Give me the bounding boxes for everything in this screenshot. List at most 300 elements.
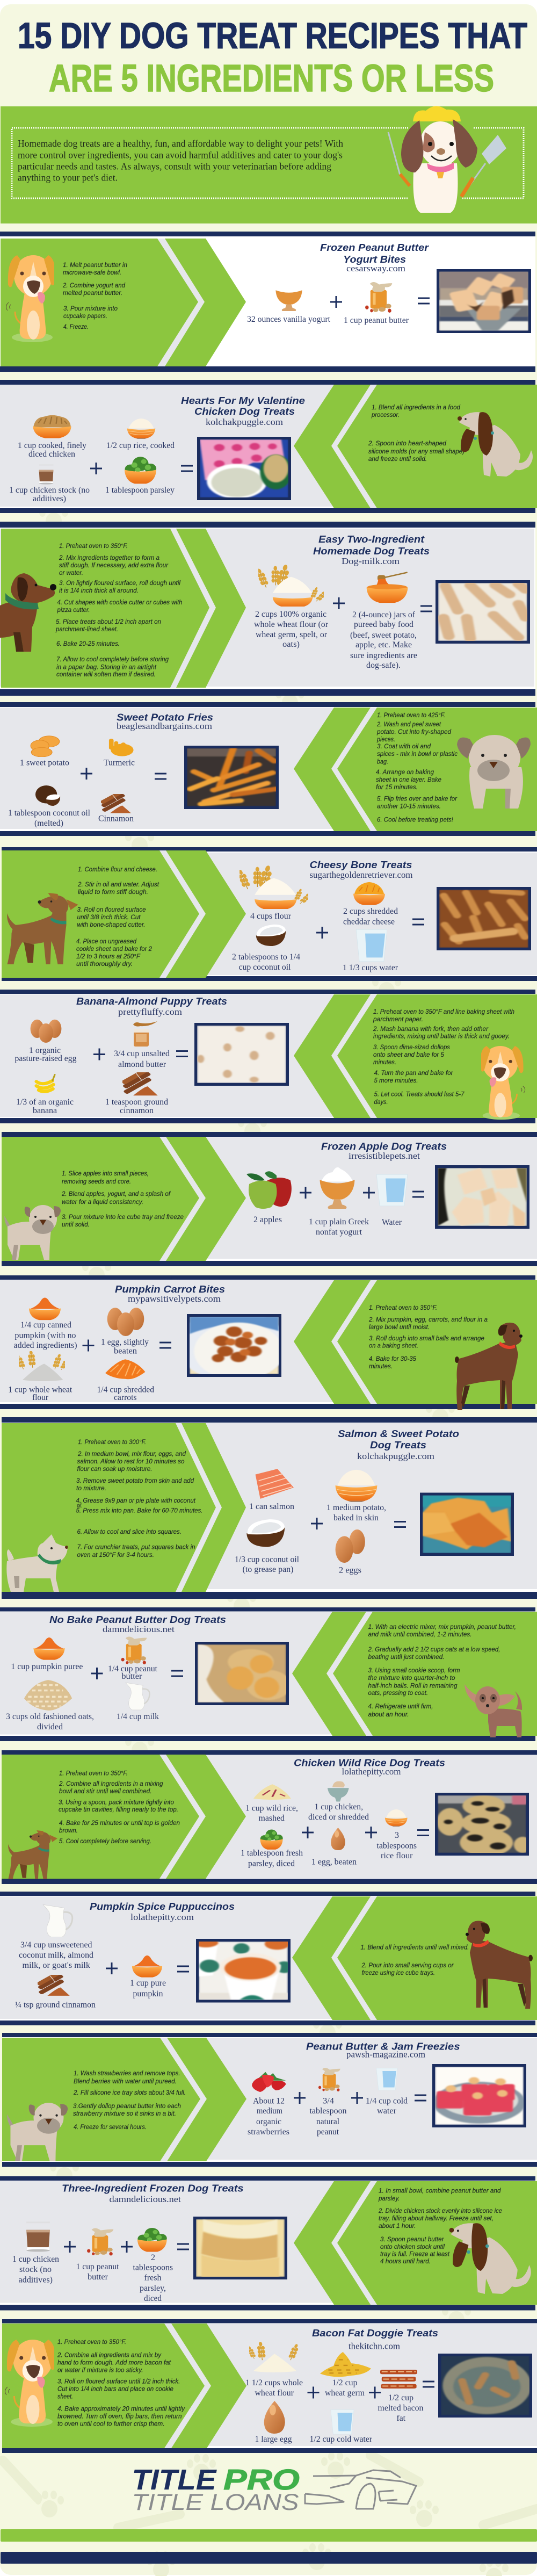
steps: 4. Arrange on baking xyxy=(376,769,434,776)
heading: pawsh-magazine.com xyxy=(346,2049,425,2060)
ingredient: parsley xyxy=(241,1829,303,1868)
ingredient: baby food: pureed baby food xyxy=(354,620,413,629)
ingredient: yogurt: 1 cup plain Greek xyxy=(309,1217,369,1226)
steps: 3. Pour mixture into ice cube tray and freeze xyxy=(62,1214,184,1221)
intro text xyxy=(18,138,343,183)
heading: No Bake Peanut Butter Dog Treats xyxy=(49,1614,226,1625)
heading xyxy=(313,534,430,566)
steps xyxy=(368,1305,488,1370)
heading xyxy=(309,860,412,880)
photo: pumpkin bites xyxy=(177,1310,288,1381)
ingredient: peanut butter: butter xyxy=(121,1672,142,1681)
steps: tray is full. Freeze at least xyxy=(380,2251,450,2257)
steps: 5. Flip fries over and bake for xyxy=(377,796,458,803)
ingredient: eggs xyxy=(336,1529,365,1575)
steps: 1. Preheat oven to 350°F. xyxy=(57,2339,126,2346)
ingredient: whole wheat flour: 1 cup whole wheat xyxy=(8,1385,72,1395)
ingredient: cheddar xyxy=(343,882,398,926)
heading: Easy Two-Ingredient xyxy=(318,534,425,545)
photo: peanut butter bites xyxy=(437,269,531,333)
steps xyxy=(368,1624,516,1718)
steps xyxy=(59,1771,180,1845)
ingredient: water: Water xyxy=(382,1218,402,1227)
ingredient: strawberries: medium xyxy=(257,2106,283,2116)
ingredient: wild rice: mashed xyxy=(259,1814,285,1823)
heading: damndelicious.net xyxy=(103,1624,175,1634)
steps: 1. Preheat oven to 350°F. xyxy=(59,543,128,550)
steps: bag. xyxy=(377,759,388,765)
steps: 3. Coat with oil and xyxy=(377,744,431,750)
ingredient: water xyxy=(309,2409,373,2444)
steps: or water. xyxy=(59,570,83,576)
steps: 2. Fill silicone ice tray slots about 3/4 full. xyxy=(73,2090,186,2096)
ingredient: egg xyxy=(255,2401,292,2444)
operators xyxy=(83,1340,171,1352)
heading: Dog Treats xyxy=(370,1440,426,1451)
icon: car outline xyxy=(305,2470,416,2509)
ingredient: coconut oil: 1/3 cup coconut oil xyxy=(235,1555,300,1564)
panel: Pumpkin Spice Puppuccinos xyxy=(0,1892,537,2025)
heading: Three-Ingredient Frozen Dog Treats xyxy=(62,2183,244,2194)
operators xyxy=(93,1049,188,1060)
heading: sugarthegoldenretriever.com xyxy=(309,870,412,880)
ingredient: milk: coconut milk, almond xyxy=(19,1951,93,1960)
navy footer band xyxy=(1,2552,537,2564)
steps: minutes. xyxy=(373,1059,396,1066)
steps: oven at 150°F for 3-4 hours. xyxy=(77,1552,154,1558)
steps xyxy=(73,2070,186,2131)
heading: Pumpkin Carrot Bites xyxy=(115,1284,225,1295)
ingredient: peanut butter xyxy=(344,282,409,325)
steps: 2. Combine all ingredients in a mixing xyxy=(59,1781,163,1787)
operators xyxy=(64,2241,189,2253)
photo: puppy treats xyxy=(194,1023,289,1086)
steps: 3. Spoon peanut butter xyxy=(380,2236,445,2243)
steps: 2. Spoon into heart-shaped xyxy=(368,441,447,447)
steps xyxy=(76,1439,203,1558)
heading xyxy=(294,1758,445,1777)
steps: 1. Preheat oven to 350°F and line baking sheet with xyxy=(373,1009,514,1015)
steps: 1. Combine flour and cheese. xyxy=(78,867,157,873)
steps: and milk until combined, 1-2 minutes. xyxy=(368,1632,471,1638)
photo: fries xyxy=(184,746,279,809)
steps: 1. Slice apples into small pieces, xyxy=(62,1171,149,1177)
steps: 1. In small bowl, combine peanut butter and xyxy=(379,2188,501,2194)
ingredient: pumpkin xyxy=(130,1956,166,1998)
steps: about 1 hour. xyxy=(379,2223,416,2229)
ingredient: oats xyxy=(6,1680,94,1731)
ingredient: wheat germ: wheat germ xyxy=(325,2389,365,2398)
steps: 6. Allow to cool and slice into squares. xyxy=(77,1529,182,1535)
steps: oats, pressing to coat. xyxy=(368,1690,428,1697)
ingredient: flour xyxy=(236,865,316,921)
steps: 3. On lightly floured surface, roll dough until xyxy=(59,580,180,587)
ingredient: cinnamon xyxy=(15,1972,96,2009)
steps: 1. Blend all ingredients in a food xyxy=(372,405,461,411)
ingredient: peanut butter: natural xyxy=(316,2117,340,2126)
steps: 5. Let cool. Treats should last 5-7 xyxy=(374,1092,465,1098)
ingredient: coconut oil: cup coconut oil xyxy=(238,963,291,972)
logo: Title Pro Title Loans: TITLE LOANS xyxy=(132,2490,299,2515)
heading: cesarsway.com xyxy=(346,263,405,273)
steps: 6. Bake 20-25 minutes. xyxy=(56,641,120,647)
panel: Pumpkin Carrot Bites xyxy=(0,1275,537,1410)
ingredient: egg: 1 organic xyxy=(29,1046,61,1055)
logo: Title Pro Title Loans: TITLE xyxy=(132,2464,217,2496)
ingredient: rice flour: tablespoons xyxy=(377,1842,417,1850)
steps: ingredients, mixing until batter is thick and gooey. xyxy=(373,1034,510,1040)
steps: onto chicken stock until xyxy=(380,2244,445,2250)
ingredient: carrots xyxy=(97,1359,154,1402)
steps: spices - mix in bowl or plastic xyxy=(377,751,458,757)
heading: thekitchn.com xyxy=(349,2341,400,2351)
ingredient: parsley: 2 xyxy=(151,2253,155,2262)
icon: beagle xyxy=(449,2223,531,2294)
ingredient: coconut oil xyxy=(232,925,300,972)
panel: Hearts For My Valentine Chicken Dog Treats xyxy=(0,380,537,513)
operators xyxy=(302,1827,429,1838)
ingredient: flour: wheat germ, spelt, or xyxy=(256,630,328,639)
ingredient: turmeric: Turmeric xyxy=(104,759,135,767)
steps: 1/2 to 3 hours at 250°F xyxy=(76,954,141,960)
steps: 4. Refrigerate until firm, xyxy=(368,1704,433,1710)
icon: golden dog xyxy=(5,2340,55,2427)
heading: Hearts For My Valentine xyxy=(181,395,305,406)
steps: 1. Preheat oven to 350°F. xyxy=(369,1305,437,1311)
heading xyxy=(320,242,429,273)
ingredient: parsley xyxy=(133,2228,173,2303)
steps: 4 hours until hard. xyxy=(380,2258,431,2265)
photo: bacon fat bones xyxy=(438,2354,532,2418)
heading xyxy=(306,2041,460,2060)
steps: melted peanut butter. xyxy=(63,290,122,297)
heading: prettyfluffy.com xyxy=(118,1007,182,1017)
icon: brown dog standing xyxy=(8,1830,57,1879)
heading xyxy=(338,1428,459,1461)
ingredient: chicken: 1 cup chicken, xyxy=(315,1802,363,1812)
steps: until solid. xyxy=(62,1222,90,1228)
ingredient: sweet potato: 1 sweet potato xyxy=(20,759,69,767)
icon: pug side xyxy=(7,2103,68,2161)
steps: Blend berries with water until pureed. xyxy=(74,2079,177,2085)
icon: doberman xyxy=(466,1921,533,2009)
ingredient: parsley: diced xyxy=(144,2294,162,2303)
ingredient: chicken stock: stock (no xyxy=(19,2265,52,2274)
ingredient: wheat germ: 1/2 cup xyxy=(332,2378,358,2387)
operators xyxy=(106,1962,189,1974)
steps xyxy=(373,1009,514,1106)
steps xyxy=(57,2339,185,2427)
ingredient: chicken stock xyxy=(9,465,90,503)
ingredient: cinnamon xyxy=(105,1069,168,1115)
heading: Chicken Dog Treats xyxy=(194,406,295,417)
ingredient: wild rice xyxy=(245,1784,298,1823)
ingredient: egg: pasture-raised egg xyxy=(15,1054,76,1063)
steps: 6. Cool before treating pets! xyxy=(377,817,454,823)
ingredient: coconut oil: (to grease pan) xyxy=(243,1565,293,1574)
steps: the mixture into quarter-inch to xyxy=(368,1675,455,1682)
heading: Peanut Butter & Jam Freezies xyxy=(306,2041,460,2052)
ingredient: chicken stock: 1 cup chicken stock (no xyxy=(9,486,90,495)
icon: pug front xyxy=(457,735,531,809)
ingredient: flour: 4 cups flour xyxy=(250,912,292,921)
steps: 5. Cool completely before serving. xyxy=(59,1838,151,1845)
ingredient: egg: 1 large egg xyxy=(255,2435,292,2444)
steps: 2. Pour into small serving cups or xyxy=(361,1962,454,1969)
steps xyxy=(378,2188,502,2265)
heading xyxy=(321,1141,447,1161)
ingredient: baby food: dog-safe). xyxy=(366,661,401,670)
steps: bowl and stir until well combined. xyxy=(59,1788,151,1795)
heading: Sweet Potato Fries xyxy=(117,712,213,723)
panel: Frozen Peanut Butter Yogurt Bites xyxy=(0,232,535,372)
operators xyxy=(307,2382,434,2398)
steps: 3. Remove sweet potato from skin and add xyxy=(76,1478,194,1484)
icon: chef dog with fork and spatula xyxy=(388,106,506,213)
heading: Dog-milk.com xyxy=(342,556,400,566)
ingredient: sweet potato: 1 medium potato, xyxy=(326,1503,386,1512)
ingredient: egg xyxy=(311,1828,357,1866)
photo: frozen apple cubes xyxy=(435,1165,529,1229)
panel: Three-Ingredient Frozen Dog Treats xyxy=(0,2176,537,2310)
ingredient: wheat flour xyxy=(245,2342,303,2398)
ingredient: coconut oil xyxy=(8,785,91,828)
operators xyxy=(81,768,166,780)
icon: pug side xyxy=(4,1205,61,1260)
steps: browned. Turn off oven, flip bars, then return xyxy=(57,2413,182,2420)
steps: 2. Mix ingredients together to form a xyxy=(59,555,159,561)
heading: damndelicious.net xyxy=(110,2194,181,2204)
operators xyxy=(311,1518,406,1529)
ingredient: carrots: carrots xyxy=(114,1393,136,1402)
panel: Banana-Almond Puppy Treats xyxy=(0,990,537,1123)
ingredient: egg xyxy=(15,1020,76,1063)
ingredient: cinnamon: Cinnamon xyxy=(98,814,134,823)
steps: freeze using ice cube trays. xyxy=(362,1970,435,1976)
intro text: Homemade dog treats are a healthy, fun, and affordable way to delight your pets! With xyxy=(18,138,343,149)
steps xyxy=(376,712,458,823)
steps: pieces. xyxy=(376,737,395,743)
steps: with bone-shaped cutter. xyxy=(77,922,145,928)
heading xyxy=(312,2328,438,2351)
photo: cheesy bones xyxy=(437,887,531,950)
steps: 4. Cut shapes with cookie cutter or cubes with xyxy=(57,600,183,606)
steps: brown. xyxy=(59,1828,78,1834)
ingredient: cinnamon: 1 teaspoon ground xyxy=(105,1098,168,1107)
heading: kolchakpuggle.com xyxy=(357,1451,434,1461)
ingredient: flour: oats) xyxy=(282,640,300,649)
icon: brown dog standing xyxy=(7,893,78,964)
ingredient: water: 1/4 cup cold xyxy=(366,2096,408,2106)
ingredient: yogurt: 32 ounces vanilla yogurt xyxy=(247,315,331,324)
heading: Yogurt Bites xyxy=(343,254,406,265)
ingredient: yogurt xyxy=(309,1167,369,1237)
steps: 3. Spoon dime-sized dollops xyxy=(373,1044,450,1051)
icon: westie xyxy=(6,1534,68,1592)
ingredient: parsley: parsley, diced xyxy=(248,1859,295,1868)
ingredient: rice flour: 3 xyxy=(395,1831,399,1840)
ingredient: cinnamon: ¼ tsp ground cinnamon xyxy=(15,2001,96,2009)
steps: 3. Using small cookie scoop, form xyxy=(368,1668,460,1674)
steps: 4. Bake for 30-35 xyxy=(369,1356,417,1362)
ingredient: peanut butter: 1 cup peanut butter xyxy=(344,316,409,325)
steps: pizza cutter. xyxy=(57,607,90,614)
steps: 4. Place on ungreased xyxy=(76,939,137,945)
steps: 3. Roll on floured surface xyxy=(77,907,146,913)
photo: puppuccino cups xyxy=(193,1938,293,2003)
ingredient: milk: milk, or goat's milk xyxy=(23,1961,90,1970)
heading: Frozen Apple Dog Treats xyxy=(321,1141,447,1152)
ingredient: oats: divided xyxy=(37,1722,63,1731)
ingredient: egg: 1 egg, slightly xyxy=(101,1338,149,1347)
steps: 3.Gently dollop peanut butter into each xyxy=(73,2103,181,2110)
heading: Salmon & Sweet Potato xyxy=(338,1428,459,1439)
steps xyxy=(76,867,159,968)
ingredient: banana: banana xyxy=(33,1106,57,1115)
steps: 3. Using a spoon, pack mixture tightly into xyxy=(59,1800,175,1806)
icon: beagle xyxy=(458,412,533,477)
icon: brown lab xyxy=(0,573,56,652)
panel: Salmon & Sweet Potato Dog Treats xyxy=(2,1417,537,1599)
panel: introduction xyxy=(1,106,537,223)
steps: to mixture. xyxy=(76,1485,106,1492)
steps: microwave-safe bowl. xyxy=(63,270,121,276)
ingredient: baby food: 2 (4-ounce) jars of xyxy=(352,610,416,619)
ingredient: chicken stock: 1 cup chicken xyxy=(12,2255,59,2264)
heading: lolathepitty.com xyxy=(130,1912,194,1922)
heading xyxy=(90,1901,235,1922)
steps: large bowl until moist. xyxy=(369,1324,430,1331)
ingredient: strawberries xyxy=(248,2072,289,2137)
steps: flour can soak up moisture. xyxy=(77,1466,153,1473)
ingredient: peanut butter: butter xyxy=(88,2272,108,2282)
panel: Easy Two-Ingredient Homemade Dog Treats xyxy=(0,522,535,696)
steps: parchment-lined sheet. xyxy=(55,626,118,633)
ingredient: strawberries: strawberries xyxy=(248,2127,289,2137)
ingredient: parsley: tablespoons xyxy=(133,2263,173,2272)
ingredient: pumpkin xyxy=(14,1297,77,1350)
ingredient: yogurt xyxy=(247,281,331,324)
photo: wild rice bites xyxy=(435,1793,532,1856)
steps xyxy=(361,1945,469,1976)
heading: lolathepitty.com xyxy=(342,1766,401,1777)
ingredient: pumpkin: added ingredients) xyxy=(14,1341,77,1350)
steps: for 15 minutes. xyxy=(376,784,418,791)
ingredient: milk xyxy=(19,1904,93,1970)
ingredient: peanut butter: peanut xyxy=(317,2127,339,2137)
ingredient: flour xyxy=(254,564,331,649)
steps: 4. Freeze for several hours. xyxy=(74,2124,147,2131)
ingredient: turmeric xyxy=(104,739,135,767)
ingredient: chicken: diced chicken xyxy=(28,450,75,459)
steps: liquid to form stiff dough. xyxy=(78,889,148,896)
operators xyxy=(330,296,430,308)
ingredient: baby food: (beef, sweet potato, xyxy=(350,631,417,640)
heading xyxy=(117,712,213,731)
steps: stiff dough. If necessary, add extra flour xyxy=(59,562,169,569)
steps: 7. For crunchier treats, put squares back in xyxy=(77,1544,195,1550)
operators xyxy=(300,1187,424,1199)
ingredient: pumpkin puree xyxy=(11,1637,83,1671)
steps: 7. Allow to cool completely before storing xyxy=(56,656,169,663)
photo: bone biscuits xyxy=(436,580,530,644)
ingredient: yogurt: nonfat yogurt xyxy=(316,1228,362,1237)
operators xyxy=(316,919,424,939)
ingredient: rice xyxy=(106,418,175,450)
ingredient: pumpkin puree: 1 cup pumpkin puree xyxy=(11,1662,83,1671)
steps: 4. Turn the pan and bake for xyxy=(374,1070,454,1077)
ingredient: wheat flour: wheat flour xyxy=(255,2389,294,2398)
ingredient: almond butter: almond butter xyxy=(118,1060,166,1069)
ingredient: sweet potato: baked in skin xyxy=(333,1513,379,1522)
steps: about an hour. xyxy=(368,1712,409,1718)
ingredient: baby food: sure ingredients are xyxy=(350,651,417,660)
steps xyxy=(368,405,465,463)
ingredient: apples xyxy=(246,1171,292,1224)
steps: 1. Preheat oven to 425°F. xyxy=(377,712,445,719)
ingredient: strawberries: organic xyxy=(256,2117,281,2126)
steps: 5. Place treats about 1/2 inch apart on xyxy=(56,619,161,625)
ingredient: pumpkin: pumpkin xyxy=(133,1989,163,1998)
steps: strawberry mixture so it sinks in a bit. xyxy=(73,2111,176,2117)
steps: container will soften them if desired. xyxy=(56,672,156,678)
steps: and freeze until solid. xyxy=(368,456,427,463)
ingredient: rice: 1/2 cup rice, cooked xyxy=(106,441,175,450)
steps: 3. Roll dough into small balls and arrange xyxy=(369,1336,484,1342)
ingredient: milk: 1/4 cup milk xyxy=(117,1712,159,1721)
steps: 1. Blend all ingredients until well mixed. xyxy=(361,1945,469,1951)
steps: sheet. xyxy=(57,2394,73,2400)
ingredient: pumpkin: 1 cup pure xyxy=(130,1979,166,1988)
photo: oat balls xyxy=(195,1642,291,1705)
steps xyxy=(55,543,182,678)
panel: Chicken Wild Rice Dog Treats xyxy=(2,1750,537,1884)
steps: it is 1/4 inch thick all around. xyxy=(59,588,139,594)
steps: oil. xyxy=(77,1503,83,1509)
title xyxy=(18,15,527,100)
intro text: more control over ingredients, you can avoid harmful additives and cater to your dog's xyxy=(18,149,343,160)
steps: salmon. Allow to rest for 10 minutes so xyxy=(77,1459,185,1465)
steps: until 3/8 inch thick. Cut xyxy=(77,914,141,921)
steps: 4. Freeze. xyxy=(63,324,89,330)
green footer band xyxy=(1,2529,537,2542)
ingredient: coconut oil xyxy=(235,1519,300,1574)
steps: cupcake papers. xyxy=(63,313,107,320)
steps: to oven until cool to further crisp them. xyxy=(57,2421,164,2427)
steps: in a paper bag. Storing in an airtight xyxy=(56,664,157,670)
heading: beaglesandbargains.com xyxy=(117,721,212,731)
steps: 5. Press mix into pan. Bake for 60-70 minutes. xyxy=(76,1507,203,1514)
ingredient: salmon: 1 can salmon xyxy=(249,1502,294,1511)
ingredient: chicken stock: additives) xyxy=(33,494,66,503)
ingredient: milk: 3/4 cup unsweetened xyxy=(20,1940,92,1950)
ingredient: milk xyxy=(117,1683,159,1721)
panel: Bacon Fat Doggie Treats xyxy=(2,2319,537,2453)
heading xyxy=(62,2183,244,2204)
steps: 2. Combine yogurt and xyxy=(62,283,126,289)
ingredient: cinnamon: cinnamon xyxy=(120,1106,154,1115)
icon: chihuahua xyxy=(465,1684,522,1737)
icon: doberman xyxy=(455,1323,523,1410)
ingredient: bacon fat: fat xyxy=(396,2414,406,2423)
ingredient: almond butter: 3/4 cup unsalted xyxy=(114,1049,170,1058)
photo: heart treats xyxy=(197,437,292,500)
ingredient: water xyxy=(366,2068,408,2116)
ingredient: parsley xyxy=(105,457,175,495)
ingredient: coconut oil: 2 tablespoons to 1/4 xyxy=(232,953,300,962)
steps: potato. Cut into fry-shaped xyxy=(376,729,452,735)
steps: 4. Grease 9x9 pan or pie plate with coconut xyxy=(76,1498,196,1504)
